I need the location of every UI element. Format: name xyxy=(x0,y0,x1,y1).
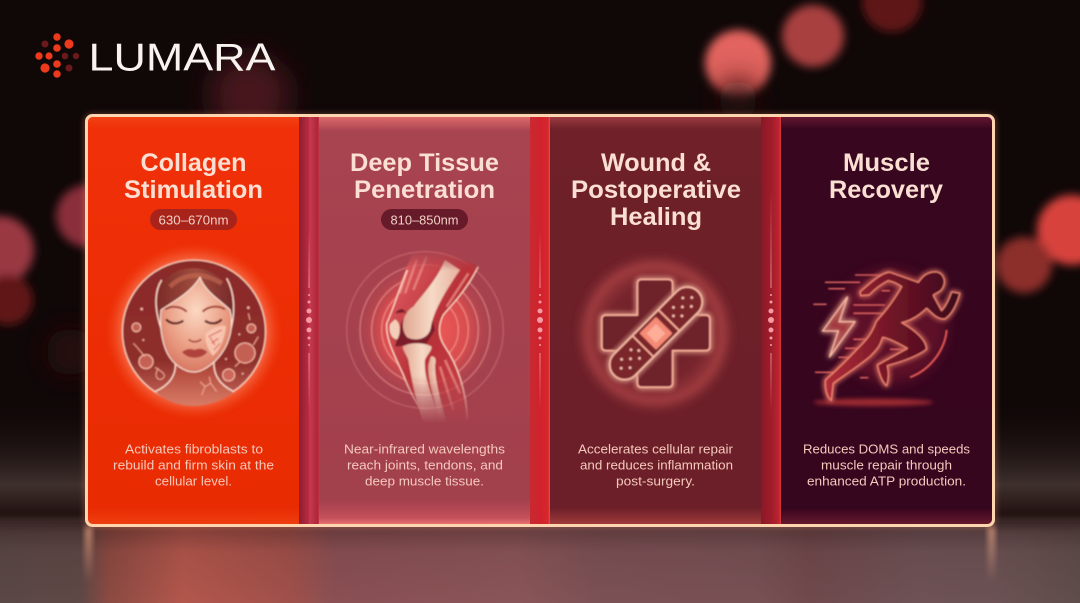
description xyxy=(803,442,970,488)
description: post-surgery. xyxy=(616,474,695,488)
heading: Stimulation xyxy=(124,176,263,204)
heading xyxy=(350,149,499,204)
heading: Wound & xyxy=(601,149,711,177)
heading xyxy=(124,149,263,204)
wordmark: LUMARA xyxy=(88,36,276,80)
panel: deep tissue penetration xyxy=(319,117,530,524)
description: and reduces inflammation xyxy=(580,458,733,472)
wavelength pill: 630–670nm xyxy=(158,214,228,228)
icon: dot cluster xyxy=(35,33,79,78)
description: reach joints, tendons, and xyxy=(347,458,503,472)
description: deep muscle tissue. xyxy=(365,474,484,488)
heading: Postoperative xyxy=(571,176,741,204)
heading: Collagen xyxy=(140,149,246,177)
divider 3 xyxy=(761,117,781,524)
divider 2 xyxy=(530,117,550,524)
description: Activates fibroblasts to xyxy=(125,442,263,456)
panel: collagen stimulation xyxy=(88,117,299,524)
heading: Deep Tissue xyxy=(350,149,499,177)
description: enhanced ATP production. xyxy=(807,474,966,488)
wavelength pill xyxy=(381,209,468,230)
frame glow xyxy=(86,116,994,526)
icon: cross and bandage xyxy=(572,250,738,417)
description: muscle repair through xyxy=(821,458,952,472)
heading xyxy=(571,149,741,231)
divider 1 xyxy=(299,117,319,524)
description: cellular level. xyxy=(155,474,232,488)
icon: sprinter and lightning bolt xyxy=(813,270,960,406)
description: rebuild and firm skin at the xyxy=(113,458,274,472)
heading: Penetration xyxy=(354,176,495,204)
heading: Healing xyxy=(610,203,702,231)
wavelength pill xyxy=(150,209,237,230)
logo xyxy=(35,33,275,80)
heading xyxy=(829,149,943,204)
wavelength pill: 810–850nm xyxy=(390,214,458,228)
description: Near-infrared wavelengths xyxy=(344,442,506,456)
icon: knee joint with rings xyxy=(347,250,503,423)
frame border xyxy=(86,116,994,526)
description xyxy=(113,442,274,488)
panel: wound and postoperative healing xyxy=(550,117,761,524)
panel: muscle recovery xyxy=(781,117,992,524)
heading: Recovery xyxy=(829,176,943,204)
heading: Muscle xyxy=(843,149,930,177)
description xyxy=(344,442,506,488)
description: Reduces DOMS and speeds xyxy=(803,442,970,456)
description xyxy=(578,442,734,488)
description: Accelerates cellular repair xyxy=(578,442,734,456)
icon: glowing face with skin cells xyxy=(107,244,281,419)
